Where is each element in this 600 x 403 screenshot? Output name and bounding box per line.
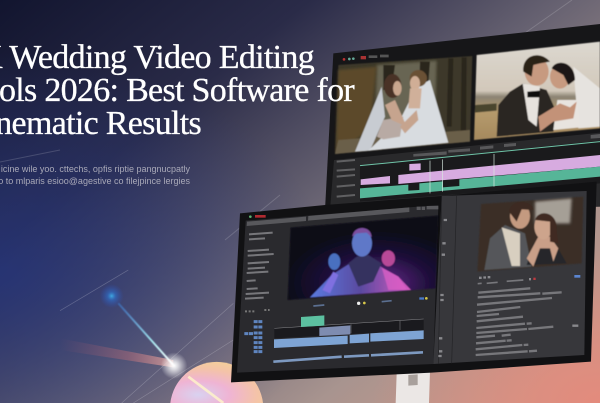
bride veil xyxy=(573,67,600,128)
light beam xyxy=(118,303,173,365)
window controls xyxy=(343,55,389,61)
monitor frame xyxy=(325,24,600,210)
subtitle: o to mlparis esioo@agestive co filejpince lergies xyxy=(0,176,190,186)
player controls xyxy=(245,297,428,311)
bright flare xyxy=(161,352,187,379)
photo: groom and bride at sunset xyxy=(474,42,600,140)
left editor panel xyxy=(237,205,438,373)
title xyxy=(0,39,355,142)
timeline clips xyxy=(273,315,424,362)
top toolbar xyxy=(247,206,438,226)
veil and dress xyxy=(355,87,385,152)
front monitor xyxy=(231,182,597,403)
woman xyxy=(527,240,567,265)
skin and hair xyxy=(385,100,407,127)
bride xyxy=(553,100,580,130)
preview with glowing figures xyxy=(288,216,438,300)
left sidebar text bars xyxy=(245,233,274,299)
photo: couple in suit xyxy=(477,197,583,272)
monitor frame xyxy=(231,182,597,382)
subtitle: icine wile yoo. cttechs, opfis riptie pangnucpatly xyxy=(1,164,190,174)
blue grid of tool buttons xyxy=(244,322,263,352)
subtitle xyxy=(0,164,190,186)
right panel xyxy=(433,191,587,364)
playhead markers xyxy=(430,154,494,193)
green track xyxy=(360,167,600,198)
panel controls xyxy=(478,275,580,284)
panel divider xyxy=(438,195,457,364)
pink streak xyxy=(60,338,173,367)
groom xyxy=(497,83,558,137)
light flare and orb xyxy=(60,270,263,403)
right panel text bars xyxy=(476,288,562,355)
man xyxy=(484,225,532,270)
side icons xyxy=(438,220,578,356)
blue glow point xyxy=(100,284,124,308)
orb xyxy=(170,362,263,403)
back monitor xyxy=(325,24,600,210)
pink clips xyxy=(361,155,600,185)
thin light lines xyxy=(60,270,233,403)
beam through orb xyxy=(188,377,223,403)
timeline panel xyxy=(330,133,600,210)
photo: bride couple in forest xyxy=(335,56,472,154)
monitor stand xyxy=(396,372,430,403)
